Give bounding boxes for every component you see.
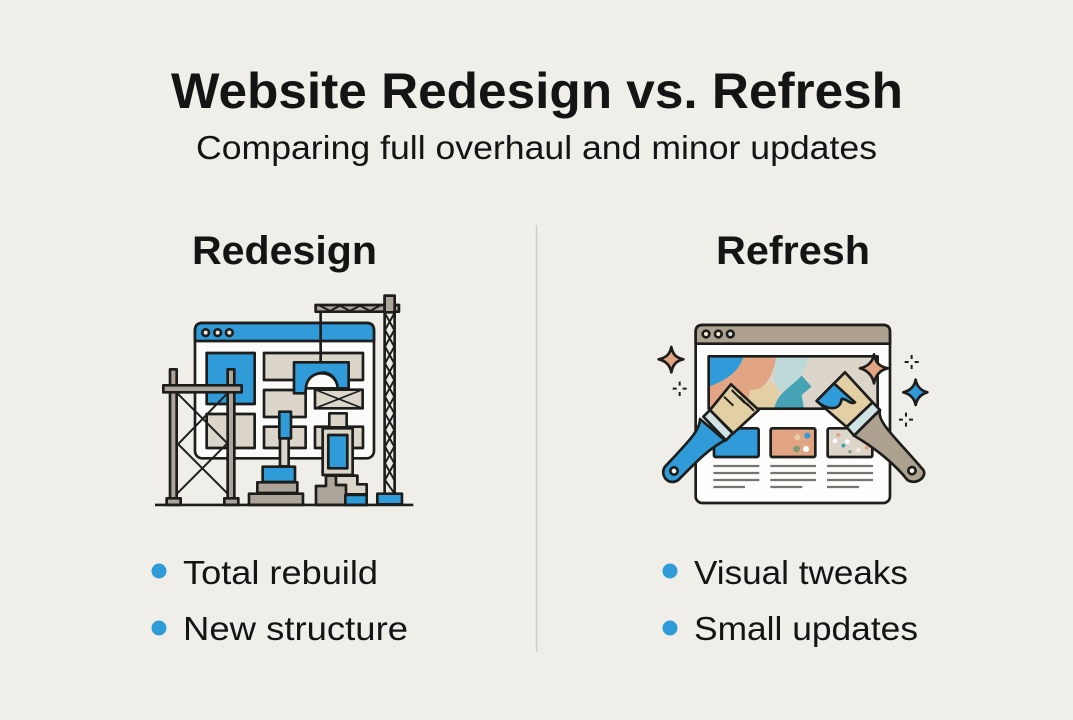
thumbnail: blue <box>714 428 759 457</box>
hoisted block <box>294 362 349 393</box>
bullet: visual tweaks: Visual tweaks <box>694 554 908 591</box>
icon: website with paint brushes <box>659 325 927 503</box>
robot figure <box>316 413 367 505</box>
panel: redesign <box>152 229 413 647</box>
heading: refresh: Refresh <box>716 229 870 273</box>
bullet: small updates: Small updates <box>694 610 918 647</box>
heading: redesign: Redesign <box>192 229 377 273</box>
brush: tan <box>817 372 924 482</box>
thumbnail: speckled <box>828 428 872 457</box>
brush: blue <box>663 384 759 482</box>
bullet: total rebuild: Total rebuild <box>183 554 378 591</box>
subtitle: Comparing full overhaul and minor updates <box>196 129 877 166</box>
hero image <box>709 356 878 409</box>
bullet: new structure: New structure <box>183 610 408 647</box>
pedestal <box>249 412 303 505</box>
sparkles <box>659 347 927 427</box>
icon: website under construction <box>155 296 413 505</box>
text lines <box>713 466 873 487</box>
thumbnail: orange <box>771 428 815 457</box>
title: Website Redesign vs. Refresh <box>171 63 903 119</box>
crane <box>316 296 402 504</box>
panel: refresh <box>659 229 927 647</box>
scaffold <box>163 369 242 505</box>
